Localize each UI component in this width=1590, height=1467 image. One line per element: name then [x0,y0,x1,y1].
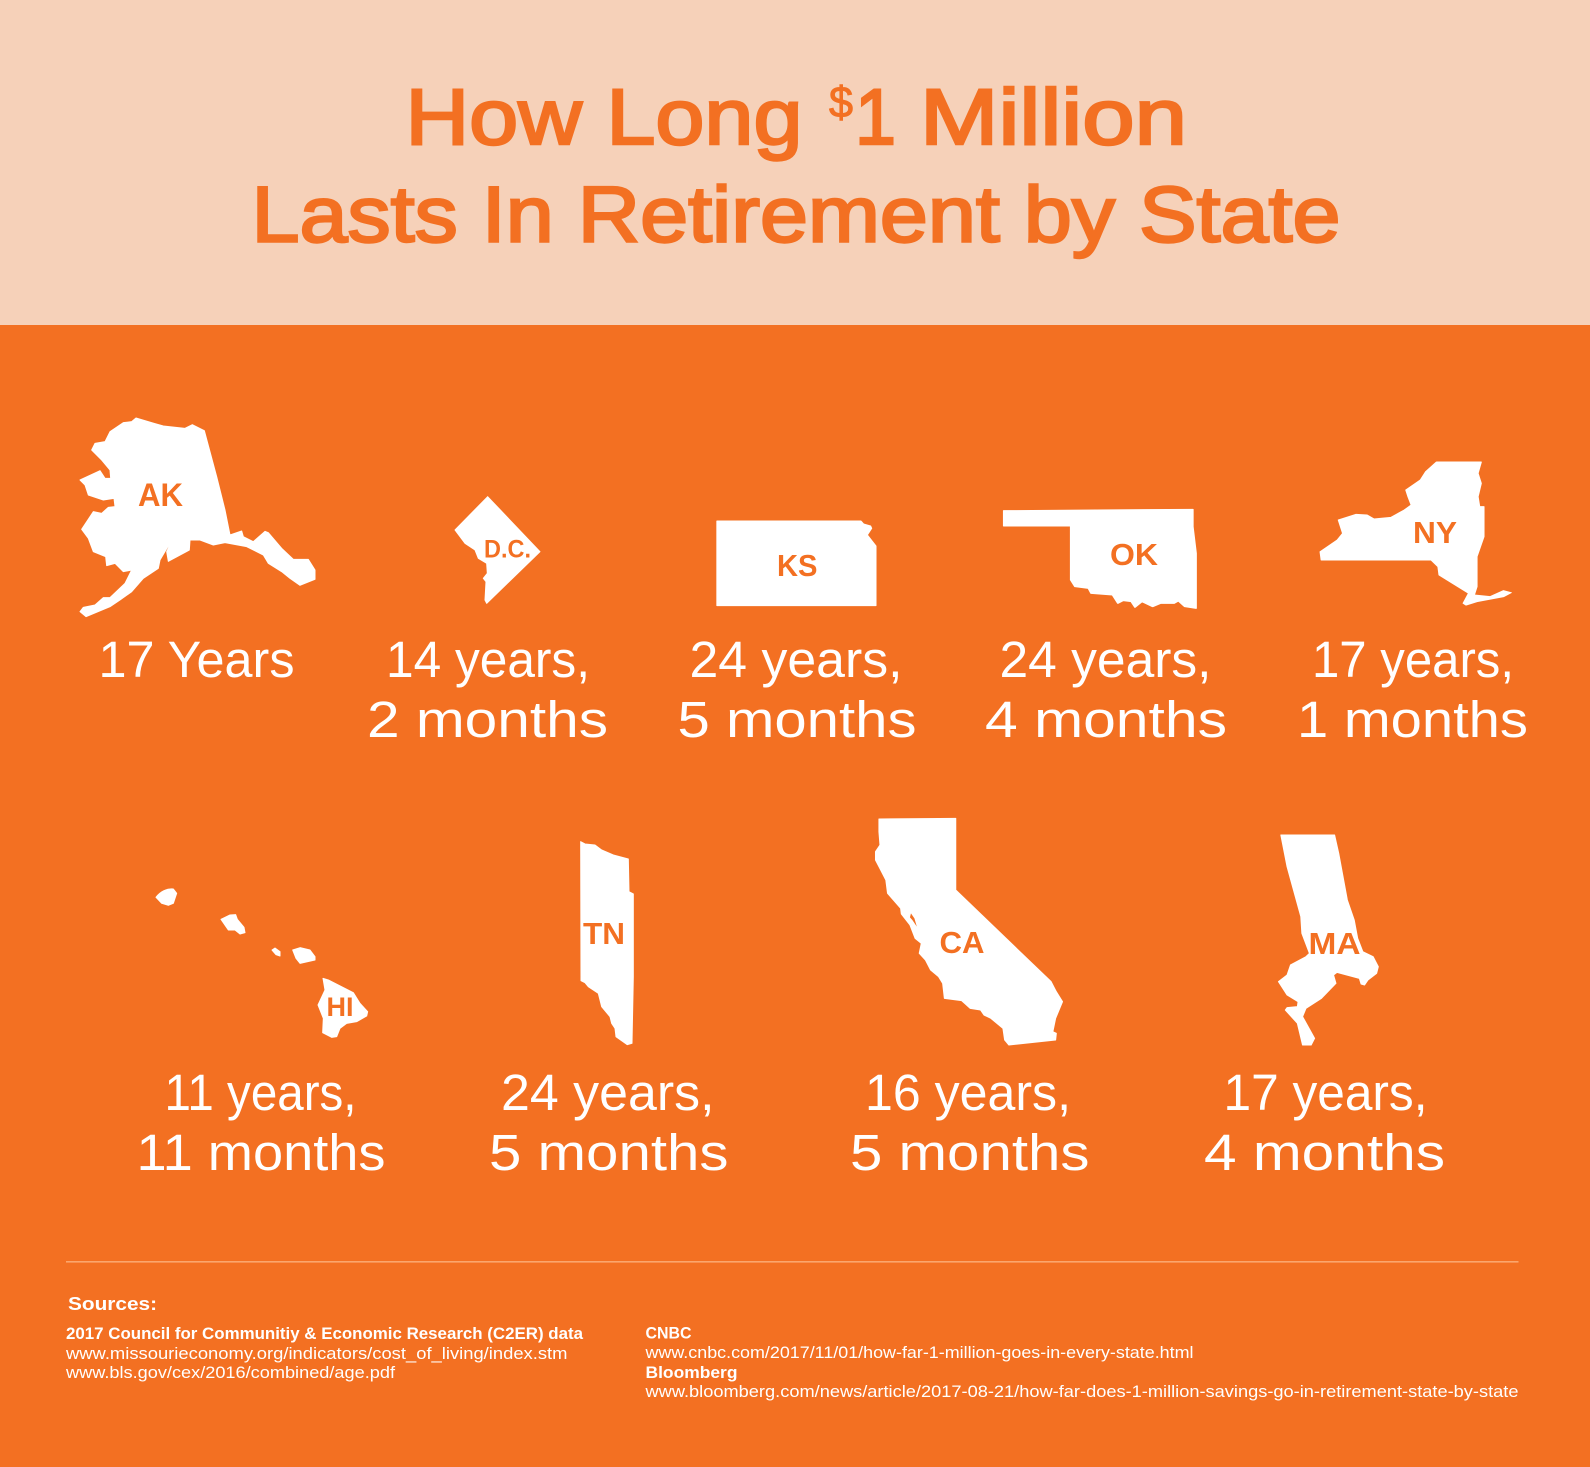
value: Hawaii: 11 years, [164,1064,356,1121]
label: D.C.: D.C. [484,536,531,564]
value: Massachusetts [1204,1064,1445,1181]
value: Hawaii: 11 months [136,1124,386,1181]
title: $ [829,78,853,127]
title: Lasts In Retirement by State [252,170,1340,258]
header band [0,0,1590,325]
value: Kansas: 24 years, [690,631,902,688]
state: New York [1297,462,1528,748]
icon: D.C. map [455,497,540,603]
label: CA: CA [940,925,984,960]
icon: Oklahoma map [1004,509,1196,608]
sources: left column: www.bls.gov/cex/2016/combined/age.pdf [65,1364,395,1382]
value: Massachusetts: 17 years, [1224,1064,1428,1121]
value: D.C.: 14 years, [386,631,590,688]
label: AK: AK [138,477,183,513]
sources: right column: CNBC [646,1324,692,1342]
value: California: 5 months [850,1124,1090,1181]
icon: Hawaii map [156,889,368,1037]
sources heading: Sources: [68,1294,157,1314]
icon: New York map [1320,462,1511,605]
state: Hawaii [136,889,386,1181]
label: MA: MA [1308,926,1360,961]
sources: right column: www.cnbc.com/2017/11/01/how-far-1-million-goes-in-every-state.html [644,1344,1194,1362]
value: Tennessee: 5 months [489,1124,728,1181]
sources: left column: www.missourieconomy.org/indicators/cost_of_living/index.stm [65,1345,568,1363]
state: D.C. [367,497,608,748]
value: Kansas: 5 months [678,691,916,748]
sources: right column [644,1324,1518,1401]
value: New York: 1 months [1297,691,1528,748]
state: Massachusetts [1204,835,1445,1181]
value: Oklahoma [985,631,1227,748]
value: Hawaii [136,1064,386,1181]
label: KS: KS [777,548,818,583]
value: Alaska: 17 Years [98,631,294,688]
icon: Tennessee map [581,842,633,1045]
value: Massachusetts: 4 months [1204,1124,1445,1181]
icon: Massachusetts map [1278,835,1378,1045]
title: Million [920,72,1187,161]
label: HI: HI [326,992,354,1022]
label: NY: NY [1413,515,1457,550]
state: Alaska [80,418,315,688]
state: California [850,818,1090,1181]
icon: Kansas map [717,521,876,606]
value: New York: 17 years, [1312,631,1514,688]
sources: left column [65,1325,584,1382]
icon: Alaska map [80,418,315,617]
value: California [850,1064,1090,1181]
value: Tennessee [489,1064,728,1181]
icon: California map [875,818,1063,1045]
title: How Long [406,72,802,161]
state: Kansas [678,521,916,748]
value: Kansas [678,631,916,748]
state: Tennessee [489,842,728,1181]
state: Oklahoma [985,509,1227,748]
title [252,72,1340,258]
value: Oklahoma: 24 years, [1000,631,1212,688]
sources: left column: 2017 Council for Communitiy & Economic Research (C2ER) data [66,1325,584,1343]
label: OK: OK [1110,537,1159,572]
value: Oklahoma: 4 months [985,691,1227,748]
sources: right column: www.bloomberg.com/news/article/2017-08-21/how-far-does-1-million-savings-go-in-retirement-state-by-state [644,1383,1518,1401]
value: D.C. [367,631,608,748]
title: 1 [855,72,896,161]
value: Tennessee: 24 years, [501,1064,714,1121]
value: New York [1297,631,1528,748]
value: California: 16 years, [865,1064,1071,1121]
label: TN: TN [583,916,625,951]
sources: right column: Bloomberg [646,1364,738,1382]
value: D.C.: 2 months [367,691,608,748]
